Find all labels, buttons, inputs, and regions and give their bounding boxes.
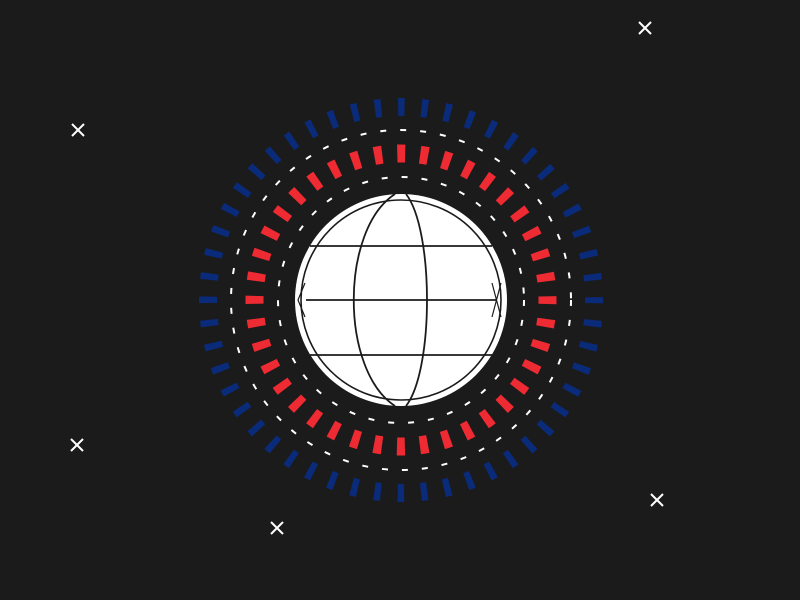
outer white dashed circle (231, 130, 571, 470)
red dashed ring (254, 154, 548, 446)
inner white dashed circle (278, 177, 524, 423)
star crosses (71, 22, 663, 534)
blue dashed ring (208, 107, 594, 493)
globe (295, 194, 507, 406)
